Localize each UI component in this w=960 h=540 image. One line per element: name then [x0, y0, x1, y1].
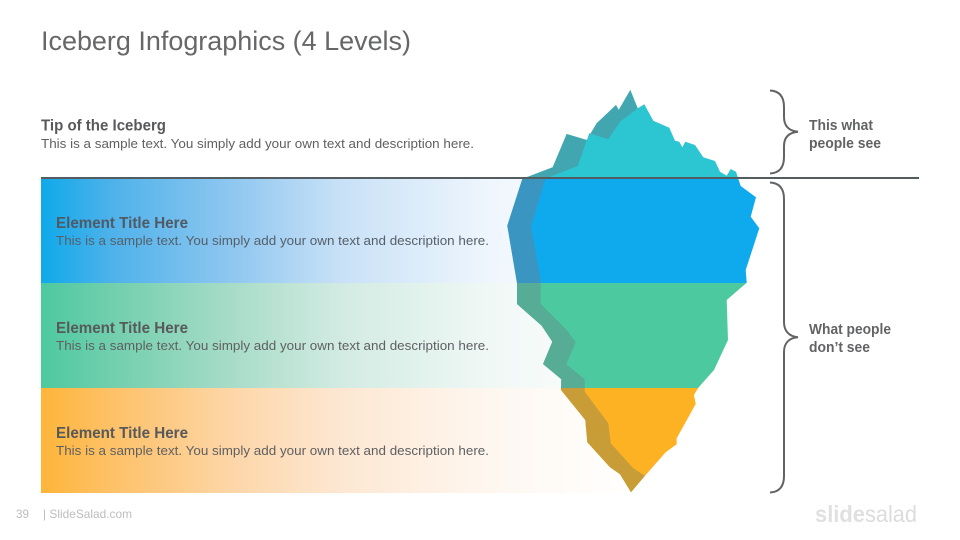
panel: blue level: This is a sample text. You simply add your own text and description here. — [56, 234, 489, 248]
label: this what people see — [809, 118, 881, 152]
iceberg illustration — [500, 85, 770, 498]
label: this what people see: people see — [809, 136, 881, 152]
text block: tip of the iceberg: This is a sample text. You simply add your own text and description here. — [41, 137, 474, 151]
footer page number: 39 — [16, 507, 29, 521]
panel: blue level: Element Title Here — [56, 215, 188, 232]
panel: orange level: This is a sample text. You simply add your own text and description here. — [56, 444, 489, 458]
label: this what people see: This what — [809, 118, 873, 134]
waterline — [41, 177, 919, 179]
title: Iceberg Infographics (4 Levels) — [41, 26, 411, 56]
logo wordmark — [815, 501, 917, 527]
brace: what people see — [770, 90, 798, 174]
text block: tip of the iceberg: Tip of the Iceberg — [41, 118, 166, 134]
panel: green level: This is a sample text. You simply add your own text and description here. — [56, 339, 489, 353]
logo wordmark: salad — [865, 501, 917, 527]
logo wordmark: slide — [815, 501, 865, 527]
text block: tip of the iceberg — [41, 118, 474, 151]
label: what people don't see: What people — [809, 322, 891, 338]
brace: what people don't see — [770, 182, 798, 492]
panel: green level: Element Title Here — [56, 320, 188, 337]
label: what people don't see — [809, 322, 891, 356]
panel: green level — [41, 283, 640, 388]
panel: orange level: Element Title Here — [56, 425, 188, 442]
label: what people don't see: don’t see — [809, 340, 870, 356]
footer source: | SlideSalad.com — [43, 507, 132, 521]
panel: blue level — [41, 178, 640, 283]
panel: orange level — [41, 388, 640, 493]
